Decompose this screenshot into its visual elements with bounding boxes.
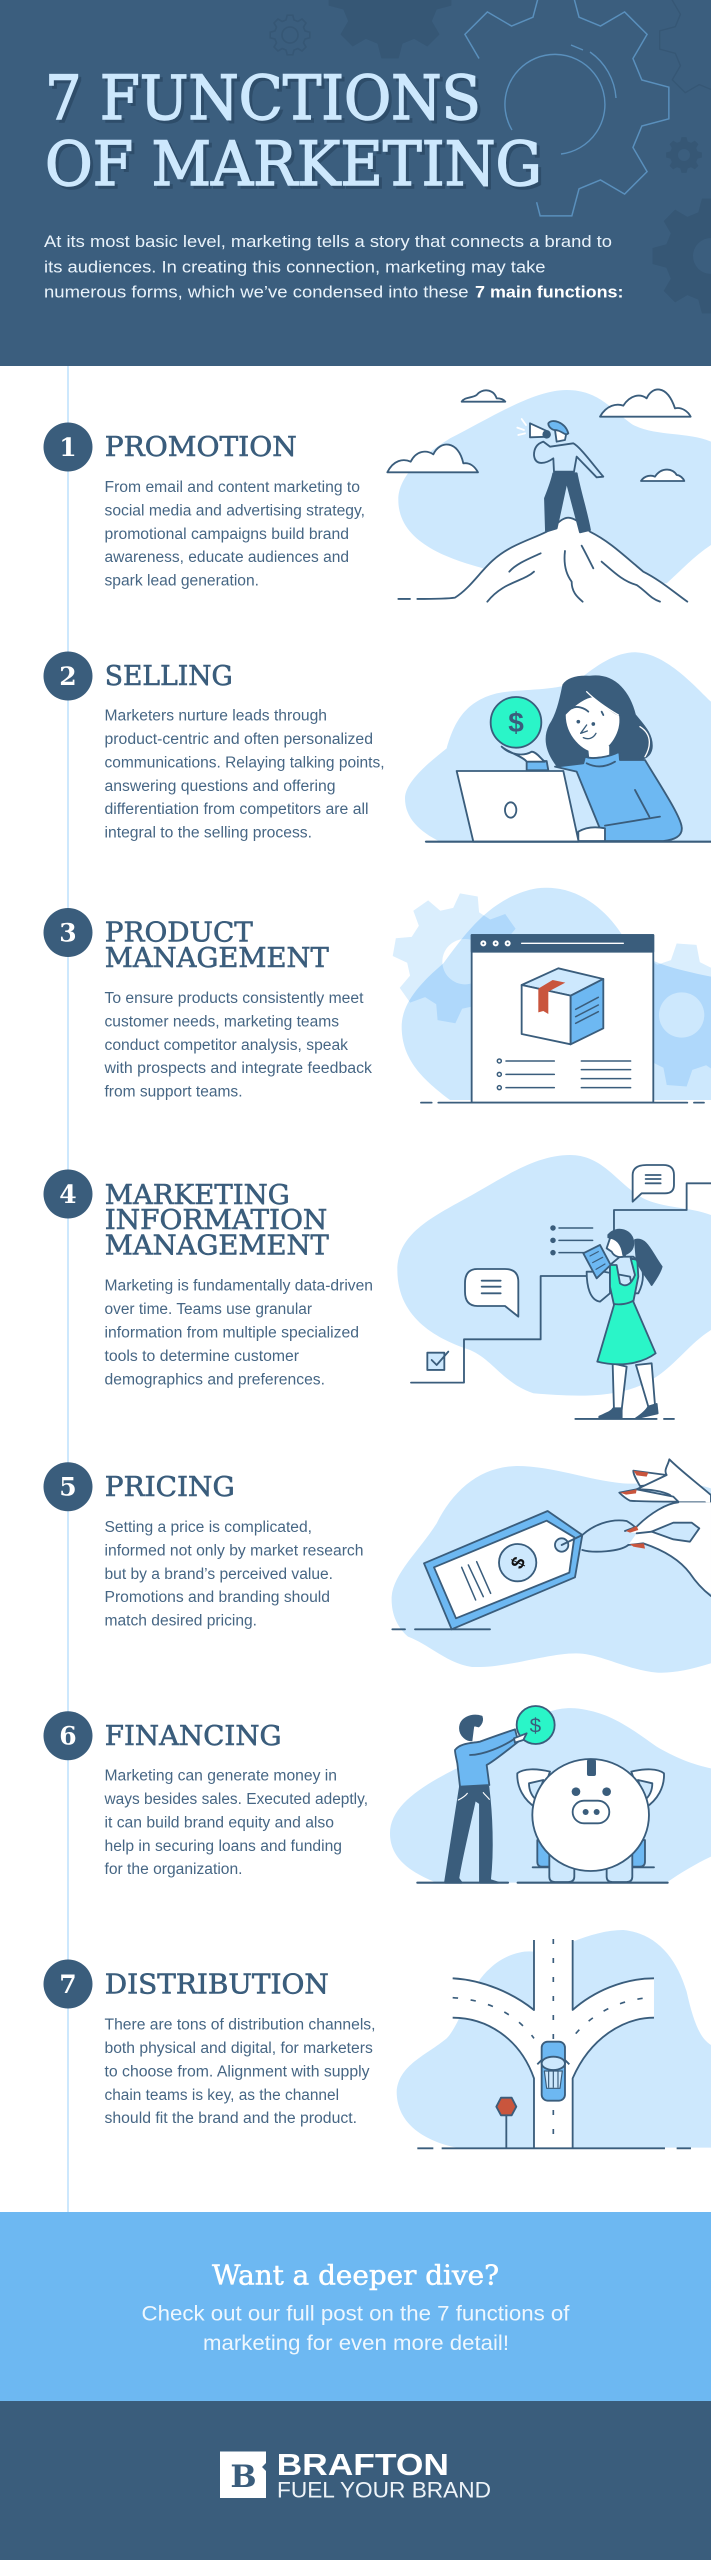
text: product management: conduct competitor analysis, speak <box>104 1037 348 1054</box>
text: promotion: social media and advertising strategy, <box>104 502 365 519</box>
number badge 2: 2 <box>59 662 77 691</box>
text: selling: product-centric and often personalized <box>104 731 373 748</box>
text: call to action <box>142 2302 570 2355</box>
text: pricing: Setting a price is complicated, <box>104 1519 312 1536</box>
illustration: man with megaphone on mountain <box>387 389 711 602</box>
intro text: 7 main functions: <box>475 282 624 302</box>
text: marketing information management: information from multiple specialized <box>104 1324 359 1342</box>
text: pricing: match desired pricing. <box>104 1612 257 1630</box>
text: selling: differentiation from competitors are all <box>104 801 368 818</box>
heading: product management: PRODUCT <box>105 917 253 948</box>
text: financing <box>104 1768 368 1878</box>
text: promotion <box>104 479 365 590</box>
heading: selling: SELLING <box>105 661 233 692</box>
number badge 2 <box>44 652 92 700</box>
number badge 5: 5 <box>59 1473 77 1502</box>
text: marketing information management: tools to determine customer <box>104 1348 299 1365</box>
text: selling <box>104 708 384 842</box>
intro text <box>44 232 624 302</box>
text: financing: ways besides sales. Executed adeptly, <box>104 1791 368 1808</box>
illustration: man and piggy bank <box>390 1706 711 1883</box>
number badge 5 <box>44 1462 92 1511</box>
number badge 7: 7 <box>59 1970 77 1999</box>
text: promotion: spark lead generation. <box>104 573 259 590</box>
panel: call to action <box>0 2212 711 2401</box>
text: selling: integral to the selling process. <box>104 825 312 842</box>
text: marketing information management: over time. Teams use granular <box>104 1301 312 1318</box>
panel: 3 product management <box>44 884 711 1103</box>
text: selling: Marketers nurture leads through <box>104 708 327 725</box>
text: distribution: chain teams is key, as the channel <box>104 2087 339 2104</box>
panel: 2 selling <box>44 652 711 842</box>
heading: product management <box>105 917 329 974</box>
number badge 4: 4 <box>59 1180 77 1209</box>
text: distribution: should fit the brand and the product. <box>104 2110 357 2127</box>
number badge 1 <box>44 422 92 472</box>
heading: marketing information management: MANAGEMENT <box>105 1231 329 1262</box>
illustration: woman at laptop with coin <box>405 652 711 842</box>
text: financing: Marketing can generate money in <box>104 1768 337 1785</box>
heading: financing: FINANCING <box>105 1721 282 1752</box>
illustration: hand holding price tag: $ <box>506 1553 530 1572</box>
text: pricing: but by a brand’s perceived value. <box>104 1566 333 1583</box>
text: distribution: There are tons of distribution channels, <box>104 2017 376 2034</box>
heading: marketing information management: MARKETING <box>105 1180 290 1211</box>
panel: 7 distribution <box>44 1930 711 2148</box>
illustration: product window with box <box>383 884 711 1103</box>
title: OF MARKETING <box>45 129 542 200</box>
text: financing: it can build brand equity and also <box>104 1814 334 1831</box>
illustration: road fork with car and stop sign <box>397 1930 711 2148</box>
text: product management: from support teams. <box>104 1084 242 1101</box>
number badge 3: 3 <box>59 918 77 948</box>
text: pricing: Promotions and branding should <box>104 1589 330 1606</box>
text: financing: help in securing loans and funding <box>104 1838 342 1855</box>
number badge 3 <box>44 908 92 957</box>
panel: header <box>0 0 711 366</box>
logo: brafton: B <box>230 2459 257 2495</box>
text: product management: customer needs, marketing teams <box>104 1013 339 1030</box>
panel: 4 marketing information management <box>44 1155 711 1419</box>
heading: promotion: PROMOTION <box>105 432 297 463</box>
text: marketing information management: demographics and preferences. <box>104 1371 325 1388</box>
intro text: its audiences. In creating this connection, marketing may take <box>44 258 546 276</box>
text: call to action: Check out our full post on the 7 functions of <box>142 2302 570 2326</box>
intro text: numerous forms, which we’ve condensed into these <box>44 282 469 302</box>
number badge 6: 6 <box>59 1722 77 1751</box>
title: 7 FUNCTIONS <box>45 63 481 134</box>
illustration: woman with clipboard on steps <box>397 1155 711 1419</box>
number badge 6 <box>44 1711 92 1760</box>
logo: brafton: BRAFTON <box>277 2447 449 2482</box>
illustration: woman at laptop with coin: $ <box>508 707 524 738</box>
text: marketing information management <box>104 1278 373 1388</box>
heading: want a deeper dive: Want a deeper dive? <box>212 2260 499 2291</box>
logo: brafton: FUEL YOUR BRAND <box>277 2478 491 2503</box>
text: product management <box>103 990 372 1101</box>
title <box>45 63 542 200</box>
heading: pricing: PRICING <box>105 1472 235 1503</box>
text: call to action: marketing for even more detail! <box>203 2332 509 2355</box>
number badge 1: 1 <box>59 433 77 462</box>
number badge 4 <box>44 1170 92 1218</box>
text: marketing information management: Marketing is fundamentally data-driven <box>104 1278 373 1295</box>
text: financing: for the organization. <box>104 1861 242 1878</box>
text: promotion: promotional campaigns build brand <box>104 526 349 543</box>
heading: product management: MANAGEMENT <box>105 943 329 974</box>
text: selling: communications. Relaying talking points, <box>104 754 384 772</box>
text: pricing: informed not only by market research <box>104 1542 364 1559</box>
panel: footer <box>0 2401 711 2560</box>
panel: 6 financing <box>44 1706 711 1883</box>
text: promotion: awareness, educate audiences and <box>104 549 349 566</box>
text: selling: answering questions and offering <box>104 778 336 795</box>
icon: header gears <box>270 0 711 313</box>
heading: marketing information management <box>105 1180 329 1262</box>
illustration: man and piggy bank: $ <box>530 1714 542 1737</box>
text: distribution <box>104 2017 376 2127</box>
text: distribution: both physical and digital, for marketers <box>104 2040 373 2057</box>
illustration: hand holding price tag <box>392 1459 711 1673</box>
logo: brafton <box>220 2447 491 2503</box>
text: product management: To ensure products consistently meet <box>104 990 364 1007</box>
heading: marketing information management: INFORMATION <box>105 1205 327 1236</box>
panel: 1 promotion <box>44 389 711 602</box>
heading: distribution: DISTRIBUTION <box>105 1970 329 2000</box>
panel: 5 pricing <box>44 1459 711 1673</box>
text: distribution: to choose from. Alignment with supply <box>104 2063 370 2080</box>
number badge 7 <box>44 1960 92 2008</box>
intro text: At its most basic level, marketing tells a story that connects a brand to <box>44 232 612 251</box>
text: promotion: From email and content marketing to <box>104 479 360 496</box>
text: pricing <box>104 1519 364 1630</box>
text: product management: with prospects and integrate feedback <box>103 1060 372 1077</box>
